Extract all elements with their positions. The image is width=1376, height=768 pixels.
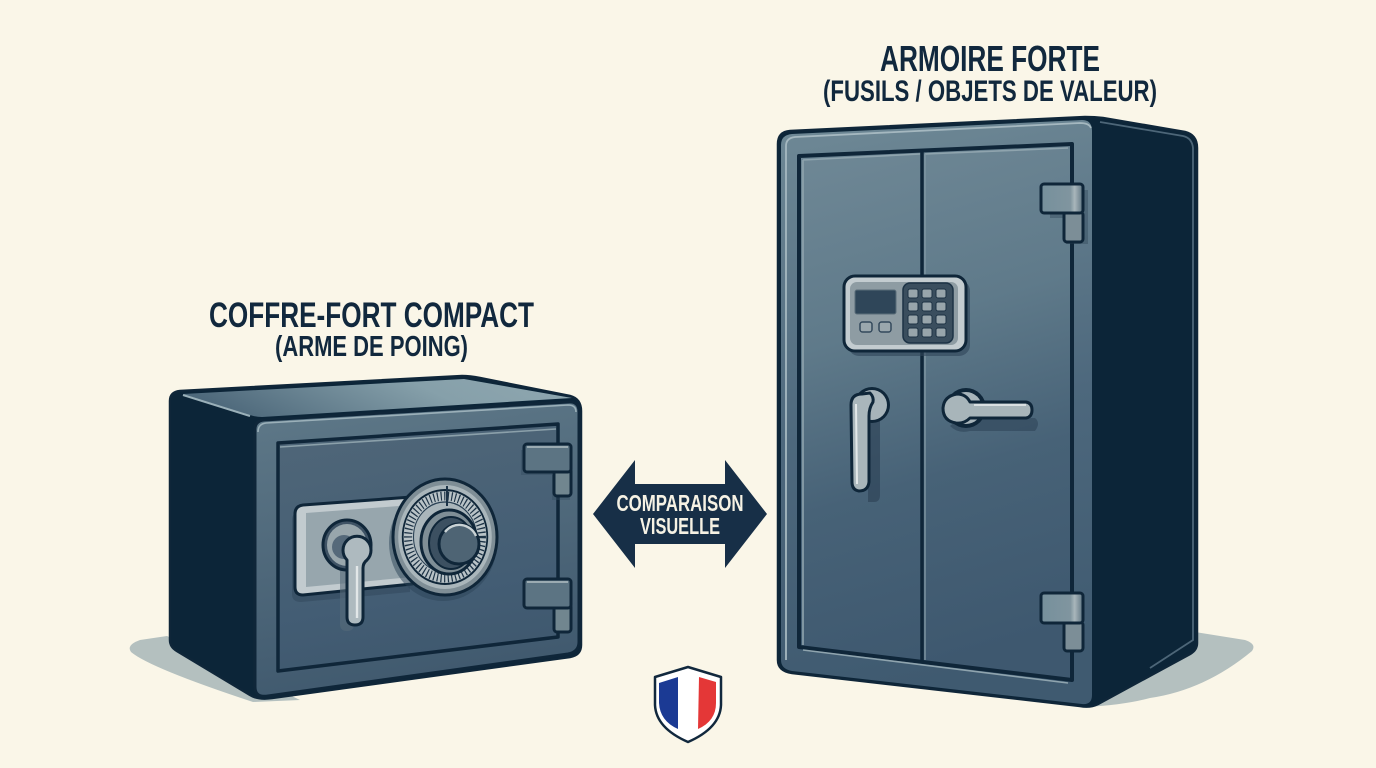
- door highlights: [803, 148, 1068, 683]
- floor shadow: compact safe: [130, 636, 300, 702]
- left edge bevel: [183, 395, 250, 416]
- door frame: [799, 144, 1072, 680]
- title: compact safe: COFFRE-FORT COMPACT: [209, 296, 534, 335]
- cabinet body: [778, 117, 1197, 707]
- front face: [255, 402, 579, 696]
- safe body: [170, 376, 581, 699]
- title: gun cabinet: ARMOIRE FORTE: [880, 38, 1100, 79]
- side highlight: [1100, 122, 1193, 668]
- front face: [781, 120, 1092, 704]
- title: gun cabinet: (FUSILS / OBJETS DE VALEUR): [823, 75, 1157, 108]
- combination dial: [389, 479, 497, 601]
- comparison arrow: VISUELLE: [640, 513, 720, 539]
- illustration: compact safe: [130, 376, 581, 702]
- front face highlight: [786, 123, 1091, 660]
- lower hinge: [524, 579, 571, 632]
- title: compact safe: [209, 296, 534, 363]
- title: compact safe: (ARME DE POING): [275, 331, 468, 363]
- lower hinge: [1041, 593, 1083, 651]
- door: [278, 424, 558, 671]
- center door split: [922, 152, 925, 662]
- top face: [183, 379, 572, 417]
- icon: French flag shield: [655, 667, 721, 742]
- comparison arrow: COMPARAISON: [616, 490, 744, 516]
- handle: [323, 520, 371, 631]
- front face highlight: [258, 405, 576, 432]
- function buttons: [860, 322, 891, 332]
- upper hinge: [521, 444, 571, 500]
- floor shadow: cabinet: [1085, 632, 1253, 707]
- door highlight: [280, 429, 556, 447]
- number pad: [903, 283, 953, 343]
- comparison arrow: [593, 460, 767, 568]
- title: gun cabinet: [823, 38, 1157, 108]
- illustration: gun cabinet: [778, 117, 1253, 707]
- display screen: [855, 290, 896, 314]
- electronic keypad lock: [844, 276, 970, 356]
- right door handle: [943, 388, 1038, 432]
- upper hinge: [1041, 184, 1088, 244]
- left door handle: [851, 387, 890, 502]
- lock plate: [292, 497, 412, 602]
